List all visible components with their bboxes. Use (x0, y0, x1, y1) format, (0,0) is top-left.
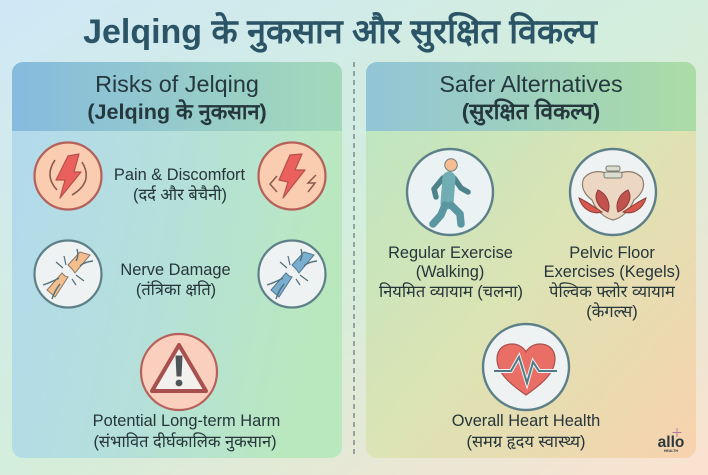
icon: warning triangle (141, 334, 217, 410)
text: pain and discomfort (114, 166, 246, 204)
panel: risks of jelqing (12, 62, 342, 458)
icon: pelvis (570, 149, 656, 235)
icon: lightning bolt with arcs (34, 142, 102, 210)
text: overall heart health (452, 412, 600, 451)
icon: damaged nerve orange (34, 240, 102, 308)
panel header: alternatives: (सुरक्षित विकल्प) (462, 98, 600, 126)
text: potential long-term harm: Potential Long-term Harm (93, 412, 280, 430)
logo: allo health: allo (658, 434, 684, 451)
text: potential long-term harm (93, 412, 280, 452)
icon: walking person (407, 149, 493, 235)
text: pelvic floor exercises (544, 244, 680, 321)
title: Jelqing के नुकसान और सुरक्षित विकल्प (83, 11, 599, 53)
text: nerve damage (120, 261, 231, 299)
text: regular exercise: नियमित व्यायाम (चलना) (379, 282, 523, 301)
text: nerve damage: Nerve Damage (120, 261, 231, 279)
panel header: risks: Risks of Jelqing (95, 71, 259, 97)
logo: allo health (658, 428, 684, 453)
icon: damaged nerve blue (258, 240, 326, 308)
panel header: risks (12, 62, 342, 131)
text: overall heart health: Overall Heart Health (452, 412, 600, 430)
panel: safer alternatives (366, 62, 696, 458)
icon: heart with pulse (483, 324, 569, 410)
logo: allo health: HEALTH (664, 449, 678, 453)
text: pelvic floor exercises: (केगल्स) (586, 302, 638, 321)
icon: lightning bolt with sparks (258, 142, 326, 210)
text: regular exercise (379, 244, 523, 301)
panel header: alternatives: Safer Alternatives (439, 71, 623, 97)
text: overall heart health: (समग्र हृदय स्वास्थ्य) (466, 433, 586, 451)
panel header: alternatives (366, 62, 696, 131)
text: potential long-term harm: (संभावित दीर्घकालिक नुकसान) (93, 432, 277, 452)
text: regular exercise: Regular Exercise (388, 244, 513, 262)
text: pain and discomfort: (दर्द और बेचैनी) (133, 185, 227, 204)
panel header: risks: (Jelqing के नुकसान) (87, 99, 267, 126)
text: pelvic floor exercises: Exercises (Kegels) (544, 263, 680, 281)
text: pelvic floor exercises: Pelvic Floor (569, 244, 655, 262)
text: nerve damage: (तंत्रिका क्षति) (136, 280, 216, 299)
text: pelvic floor exercises: पेल्विक फ्लोर व्यायाम (549, 282, 676, 301)
text: regular exercise: (Walking) (416, 263, 484, 281)
text: pain and discomfort: Pain & Discomfort (114, 166, 246, 184)
